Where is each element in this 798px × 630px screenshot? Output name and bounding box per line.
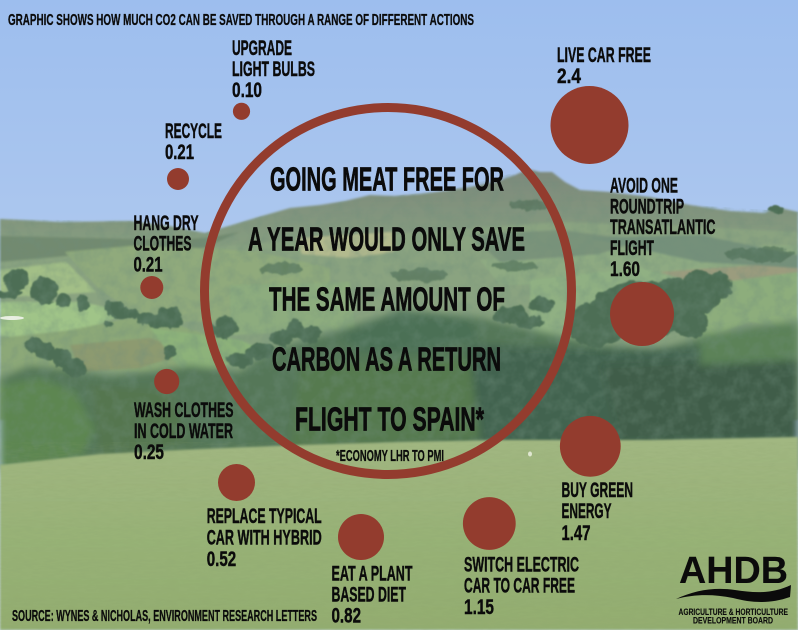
item: upgrade light bulbs: LIGHT BULBS — [232, 57, 315, 81]
item: replace typical car with hybrid: 0.52 — [207, 547, 236, 571]
item: replace typical car with hybrid: REPLACE TYPICAL — [207, 504, 322, 528]
item: switch electric car to car free: CAR TO CAR FREE — [464, 574, 575, 598]
item: wash clothes in cold water: WASH CLOTHES — [134, 398, 234, 422]
item: recycle: 0.21 — [165, 140, 194, 164]
item: upgrade light bulbs: UPGRADE — [232, 36, 292, 60]
item: hang dry clothes — [134, 211, 198, 299]
item: avoid one roundtrip transatlantic flight: 1.60 — [610, 257, 640, 281]
item: buy green energy: ENERGY — [562, 499, 612, 523]
item: upgrade light bulbs: 0.10 — [232, 78, 262, 102]
item: replace typical car with hybrid — [207, 464, 322, 571]
item: avoid one roundtrip transatlantic flight: FLIGHT — [610, 236, 654, 260]
central message: A YEAR WOULD ONLY SAVE — [248, 220, 525, 258]
central message — [248, 160, 525, 438]
source: SOURCE: WYNES & NICHOLAS, ENVIRONMENT RESEARCH LETTERS — [12, 608, 317, 625]
item: switch electric car to car free: SWITCH ELECTRIC — [464, 553, 579, 577]
central message: CARBON AS A RETURN — [272, 340, 501, 378]
central message: FLIGHT TO SPAIN* — [295, 400, 484, 438]
item: wash clothes in cold water: IN COLD WATER — [134, 419, 233, 443]
item: buy green energy: BUY GREEN — [562, 478, 633, 502]
central ring — [204, 108, 572, 474]
logo: AHDB — [676, 550, 791, 626]
item: eat a plant based diet: EAT A PLANT — [332, 562, 412, 586]
item: hang dry clothes: HANG DRY — [134, 211, 198, 235]
item: switch electric car to car free: 1.15 — [464, 595, 494, 619]
item: replace typical car with hybrid: CAR WITH HYBRID — [207, 526, 322, 550]
footnote: *ECONOMY LHR TO PMI — [336, 448, 444, 465]
item: wash clothes in cold water: 0.25 — [134, 440, 164, 464]
item: buy green energy — [560, 416, 633, 545]
logo: AHDB: AHDB — [679, 550, 788, 592]
item: avoid one roundtrip transatlantic flight: ROUNDTRIP — [610, 194, 684, 218]
item: buy green energy: 1.47 — [562, 521, 591, 545]
logo: AHDB: DEVELOPMENT BOARD — [693, 616, 773, 626]
item: recycle: RECYCLE — [165, 119, 222, 143]
item: switch electric car to car free — [463, 497, 579, 619]
item: avoid one roundtrip transatlantic flight: AVOID ONE — [610, 174, 678, 198]
item: live car free — [550, 43, 651, 164]
item: wash clothes in cold water — [134, 369, 234, 464]
central message: THE SAME AMOUNT OF — [269, 280, 505, 318]
item: upgrade light bulbs — [232, 36, 315, 120]
item: eat a plant based diet: BASED DIET — [332, 582, 406, 606]
item: live car free: 2.4 — [557, 64, 581, 88]
item: hang dry clothes: CLOTHES — [134, 232, 192, 256]
item: live car free: LIVE CAR FREE — [557, 43, 651, 67]
item: hang dry clothes: 0.21 — [134, 253, 163, 277]
item: avoid one roundtrip transatlantic flight — [610, 174, 716, 346]
item: eat a plant based diet — [332, 514, 412, 628]
item: recycle — [165, 119, 222, 190]
item: eat a plant based diet: 0.82 — [332, 604, 361, 628]
title: GRAPHIC SHOWS HOW MUCH CO2 CAN BE SAVED THROUGH A RANGE OF DIFFERENT ACTIONS — [8, 12, 474, 29]
item: avoid one roundtrip transatlantic flight: TRANSATLANTIC — [610, 215, 716, 239]
central message: GOING MEAT FREE FOR — [270, 160, 504, 198]
